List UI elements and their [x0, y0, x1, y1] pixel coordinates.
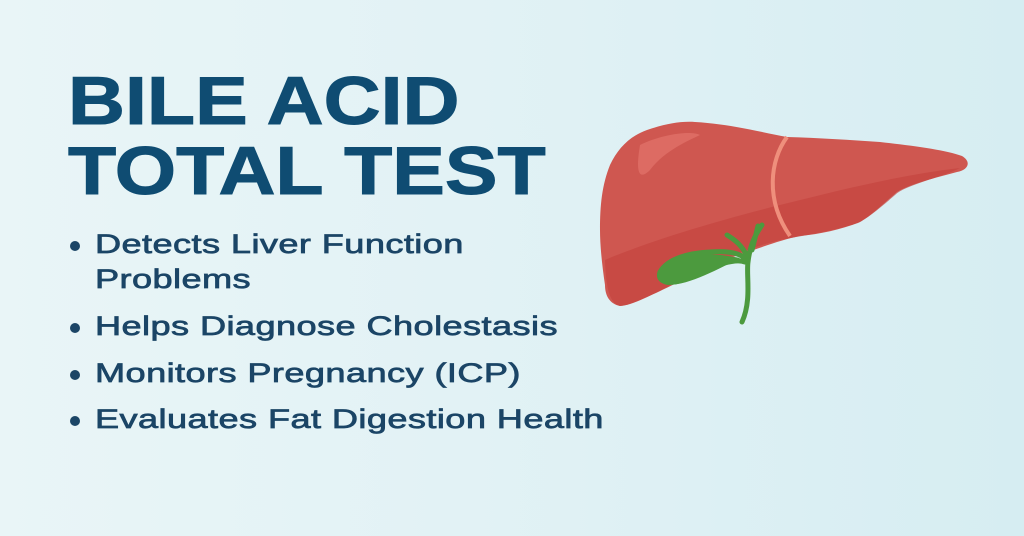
bullet list: Detects Liver Function: [95, 229, 464, 259]
bullet: cholestasis: [70, 311, 558, 341]
bullet: detects liver function: [70, 229, 464, 294]
bullet list: Problems: [95, 264, 251, 294]
title: [68, 63, 546, 209]
bullet: fat digestion: [70, 404, 604, 434]
bullet list: Helps Diagnose Cholestasis: [95, 311, 558, 341]
bullet: pregnancy: [70, 358, 521, 388]
bullet list: [70, 229, 604, 434]
bullet list: Evaluates Fat Digestion Health: [95, 404, 604, 434]
title: BILE ACID: [68, 63, 459, 139]
title: TOTAL TEST: [68, 133, 546, 209]
bullet list: Monitors Pregnancy (ICP): [95, 358, 521, 388]
